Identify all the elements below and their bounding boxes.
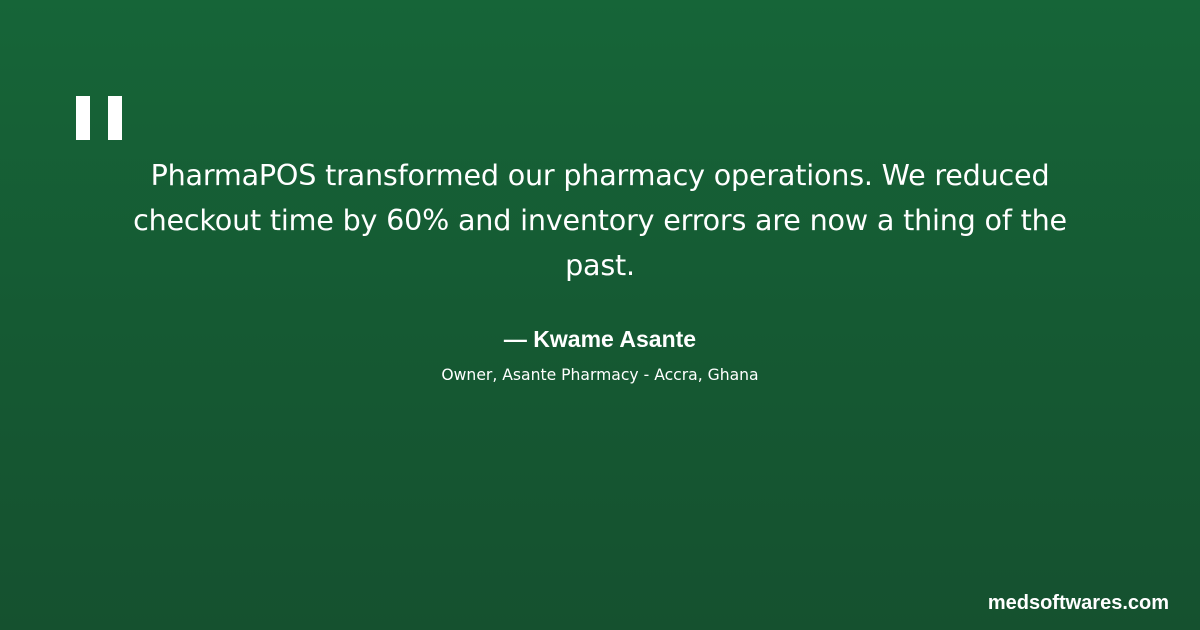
author name: — Kwame Asante [504,326,696,352]
quote text: PharmaPOS transformed our pharmacy operations. We reduced checkout time by 60% and inventory errors are now a thing of the past. [133,158,1067,282]
author role: Owner, Asante Pharmacy - Accra, Ghana [441,366,759,384]
icon: quote mark [76,96,122,140]
website: medsoftwares.com [988,592,1169,614]
